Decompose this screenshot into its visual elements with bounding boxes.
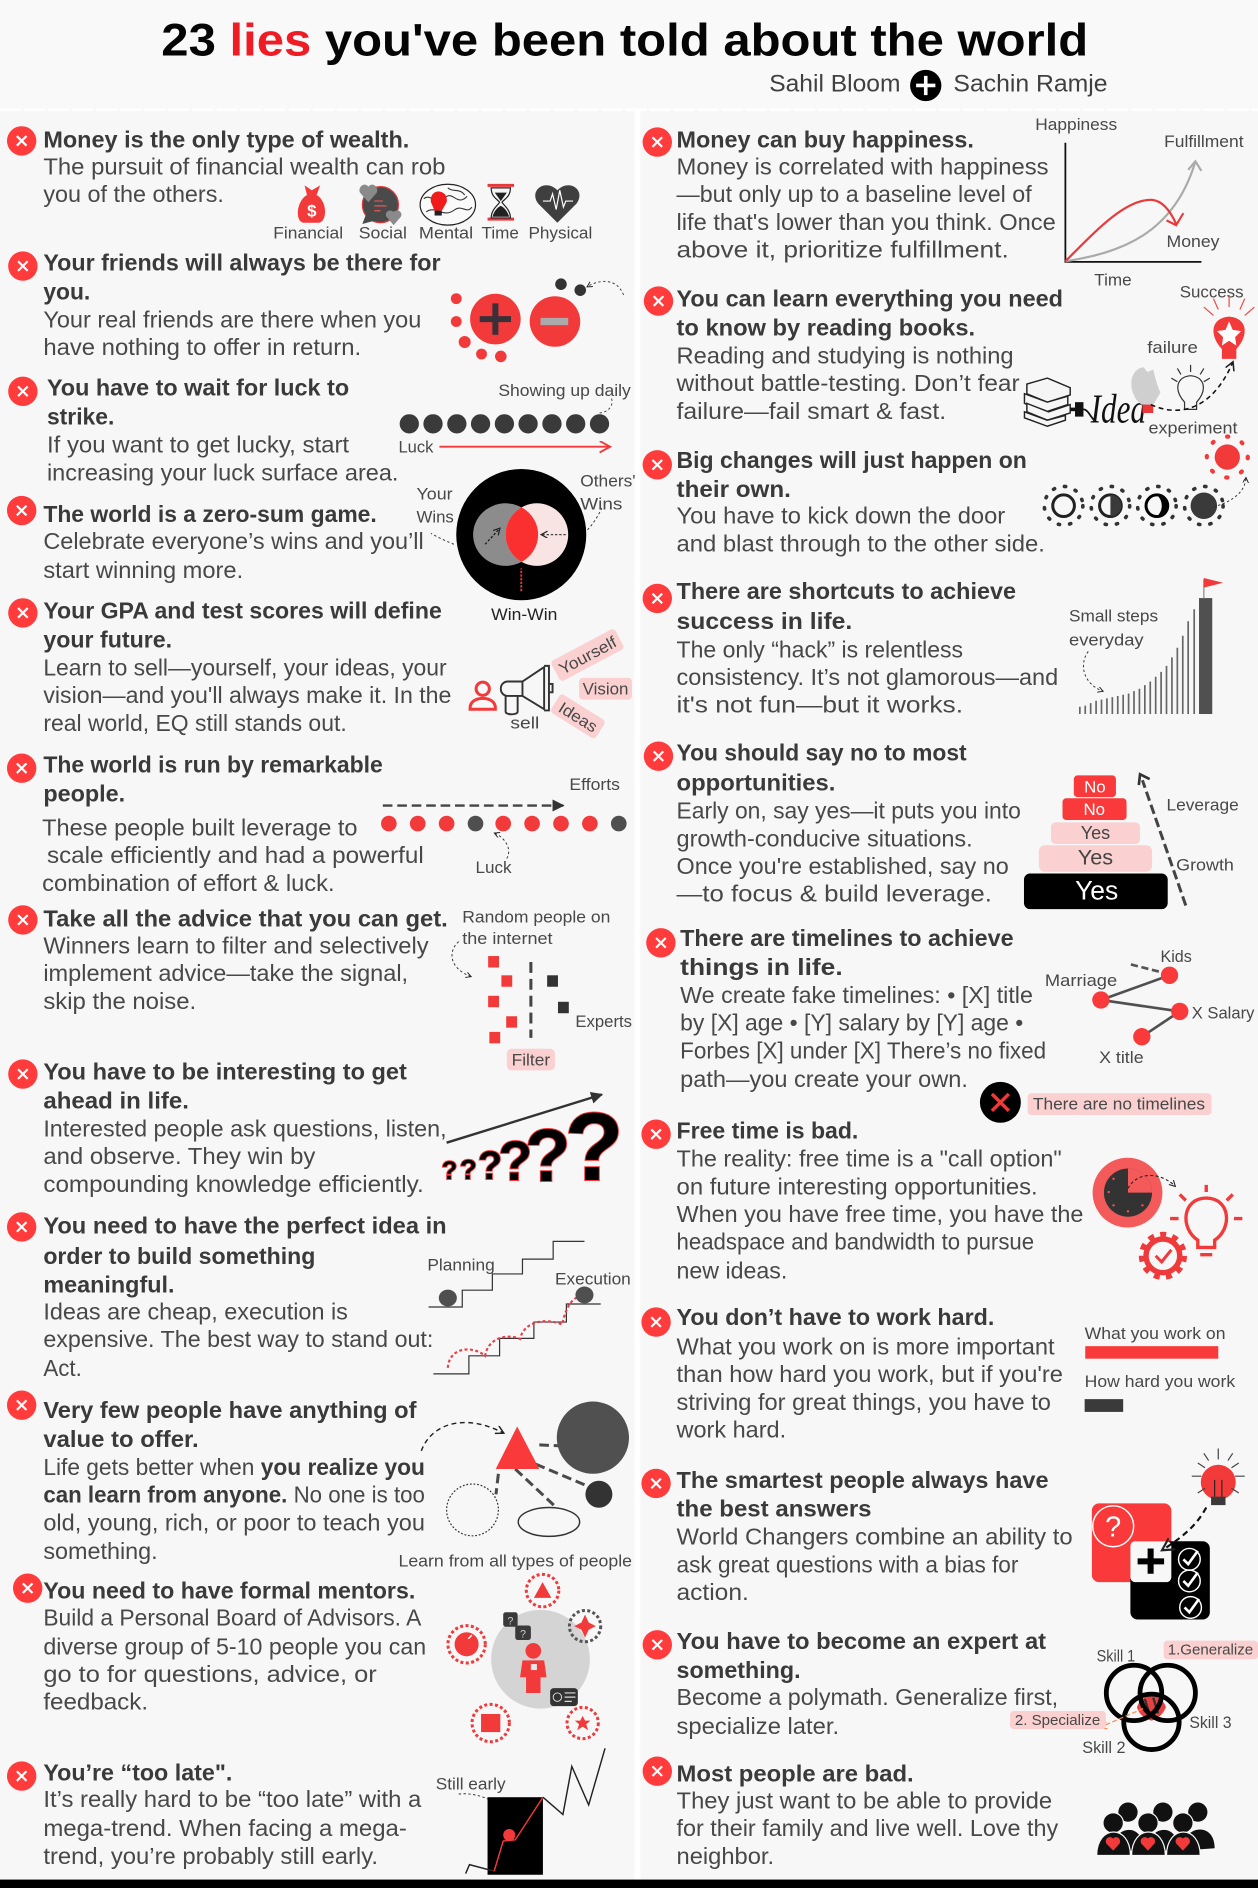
diagram: filter advice — [452, 908, 632, 1070]
lie: perfect idea: Act. — [43, 1355, 82, 1381]
lie: work hard: than how hard you work, but if you're — [677, 1361, 1063, 1387]
icon: broken bulb — [1131, 367, 1160, 413]
lie: most people bad: Most people are bad. — [677, 1761, 914, 1787]
diagram: win-win venn: Others' — [580, 472, 636, 490]
icon: black X badge — [980, 1082, 1021, 1123]
lie: timelines: by [X] age • [Y] salary by [Y] age • — [680, 1010, 1023, 1036]
lie: expert: specialize later. — [677, 1713, 839, 1739]
lie: books: Reading and studying is nothing — [677, 343, 1014, 369]
diagram: question marks and arrow: ? — [442, 1157, 457, 1185]
diagram: win-win venn: Wins — [580, 495, 622, 513]
lie: timelines: Forbes [X] under [X] There’s no fixed — [680, 1037, 1046, 1063]
chart: money vs fulfillment: Happiness — [1035, 116, 1117, 134]
lie: advice — [8, 905, 448, 1014]
diagram: skills venn: Skill 3 — [1189, 1714, 1232, 1732]
lie: mentors: You need to have formal mentors. — [43, 1578, 415, 1604]
icon: gear check — [1141, 1234, 1185, 1278]
lie: work hard: What you work on is more important — [677, 1333, 1055, 1359]
icons: five types of wealth: Time — [482, 224, 519, 242]
diagram: question marks and arrow — [442, 1094, 623, 1201]
lie: free time: When you have free time, you have the — [677, 1201, 1083, 1227]
chart: money vs fulfillment — [1035, 116, 1244, 289]
lie: most people bad: neighbor. — [677, 1843, 774, 1869]
diagram: filter advice: Random people on — [462, 908, 610, 926]
lie: smartest people: World Changers combine an ability to — [677, 1524, 1073, 1550]
lie: luck: You have to wait for luck to — [47, 375, 349, 401]
lie: friends: Your friends will always be there for — [43, 249, 441, 275]
lie: interesting: and observe. They win by — [43, 1143, 316, 1169]
lie: remarkable people: The world is run by remarkable — [43, 752, 383, 778]
lie: most people bad: for their family and live well. Love thy — [677, 1815, 1059, 1841]
lie: timelines: things in life. — [680, 954, 843, 980]
diagram: question marks and arrow: ? — [525, 1113, 570, 1197]
title: 23 lies you've been told about the world — [161, 14, 1088, 65]
lie: interesting: ahead in life. — [43, 1087, 189, 1113]
lie: money wealth: you of the others. — [43, 181, 224, 207]
lie: expert: something. — [677, 1657, 801, 1683]
diagram: yes no pyramid — [1024, 774, 1239, 909]
diagram: filter advice: the internet — [462, 930, 553, 948]
icon: heart pulse — [535, 185, 579, 223]
lie: smartest people: ask great questions with a bias for — [677, 1551, 1019, 1577]
diagram: showing up daily — [398, 382, 632, 457]
authors: Sahil Bloom — [769, 71, 900, 98]
lie: luck: increasing your luck surface area. — [47, 459, 398, 485]
authors: Sachin Ramje — [953, 71, 1108, 98]
lie: perfect idea: meaningful. — [43, 1272, 175, 1298]
lie: money wealth: Money is the only type of wealth. — [43, 127, 409, 153]
tag: Vision: Vision — [583, 681, 628, 699]
chart: money vs fulfillment: Time — [1094, 271, 1132, 289]
tag: Filter — [507, 1049, 555, 1070]
diagram: yes no pyramid: Leverage — [1167, 796, 1239, 814]
lie: GPA: real world, EQ still stands out. — [43, 710, 347, 736]
icon: people with hearts — [1097, 1803, 1215, 1855]
lie: GPA: vision—and you'll always make it. In the — [43, 682, 451, 708]
chart: money vs fulfillment: Money — [1167, 233, 1220, 251]
lie: free time: on future interesting opportunities. — [677, 1173, 1038, 1199]
diagram: all types of people: Learn from all types of people — [398, 1553, 632, 1571]
lie: shortcuts: success in life. — [677, 608, 852, 634]
lie: most people bad: They just want to be able to provide — [677, 1787, 1052, 1813]
lie: value to offer: Very few people have anything of — [43, 1397, 417, 1423]
lie: work hard — [641, 1304, 1063, 1443]
lie: smartest people: the best answers — [677, 1496, 872, 1522]
diagram: question marks and arrow: ? — [565, 1094, 623, 1201]
icon: social bubble — [359, 185, 401, 225]
lie: say no: opportunities. — [677, 770, 835, 796]
lie: expert: Become a polymath. Generalize first, — [677, 1684, 1058, 1710]
diagram: questions plus action — [1092, 1449, 1245, 1619]
lie: free time: new ideas. — [677, 1258, 787, 1284]
lie: big changes — [643, 447, 1045, 556]
diagram: skills venn: Skill 2 — [1082, 1739, 1126, 1757]
lie: remarkable people: combination of effort & luck. — [42, 870, 335, 896]
diagram: efforts and luck dots: Luck — [476, 859, 513, 877]
lie: luck: strike. — [47, 404, 114, 430]
diagram: skills venn — [1010, 1641, 1258, 1757]
lie: value to offer — [7, 1390, 425, 1564]
lie: big changes: Big changes will just happen on — [677, 447, 1027, 473]
lie: interesting: compounding knowledge efficiently. — [43, 1171, 424, 1197]
lie: luck: If you want to get lucky, start — [47, 432, 350, 458]
icon: books — [1024, 378, 1070, 426]
diagram: idea to success: Success — [1180, 283, 1244, 301]
lie: books: to know by reading books. — [677, 314, 975, 340]
lie: buy happiness: Money is correlated with happiness — [677, 153, 1049, 179]
lie: luck — [8, 375, 398, 485]
diagram: win-win venn: Win-Win — [491, 606, 557, 624]
icon: money bag: $ — [307, 202, 317, 221]
lie: mentors: Build a Personal Board of Advisors. A — [43, 1604, 422, 1630]
lie: free time: headspace and bandwidth to pursue — [677, 1229, 1034, 1255]
lie: GPA: your future. — [43, 626, 172, 652]
lie: say no: Once you're established, say no — [677, 853, 1009, 879]
icon: success bulb — [1204, 295, 1254, 359]
icon: person — [470, 682, 495, 709]
diagram: idea to success: failure — [1147, 339, 1198, 357]
lie: zero-sum: The world is a zero-sum game. — [43, 501, 377, 527]
diagram: yes no pyramid: Yes — [1075, 875, 1118, 905]
diagram: efforts and luck dots — [381, 776, 627, 877]
lie: mentors: diverse group of 5-10 people you can — [43, 1633, 426, 1659]
lie: remarkable people: These people built leverage to — [42, 815, 358, 841]
lie: value to offer: Life gets better when you realize you — [43, 1454, 425, 1480]
lie: too late: You’re “too late". — [43, 1759, 232, 1785]
authors — [769, 70, 1108, 101]
lie: buy happiness: above it, prioritize fulfillment. — [677, 237, 1009, 263]
diagram: idea to success: experiment — [1148, 419, 1238, 437]
icon: plus badge — [910, 70, 941, 101]
lie: friends: Your real friends are there when you — [43, 306, 421, 332]
lie: advice: Take all the advice that you can get. — [43, 906, 448, 932]
lie: expert — [643, 1628, 1058, 1739]
diagram: yes no pyramid: Growth — [1176, 857, 1234, 875]
diagram: efforts and luck dots: Efforts — [569, 776, 620, 794]
lie: perfect idea: order to build something — [43, 1243, 315, 1269]
diagram: board of advisors: ? — [520, 1629, 526, 1641]
lie: zero-sum: Celebrate everyone’s wins and you’ll — [43, 528, 424, 554]
diagram: idea to success — [1024, 283, 1254, 437]
icons: five types of wealth: Physical — [528, 224, 592, 242]
lie: mentors: feedback. — [43, 1689, 148, 1715]
icon: hourglass — [488, 185, 514, 219]
lie: money wealth — [7, 126, 445, 207]
tag: Vision — [579, 678, 632, 700]
diagram: megaphone sell: sell — [510, 714, 539, 732]
lie: advice: skip the noise. — [43, 988, 196, 1014]
lie: say no: growth-conducive situations. — [677, 825, 973, 851]
diagram: yes no pyramid: Yes — [1081, 823, 1110, 843]
diagram: questions plus action: ? — [1105, 1511, 1121, 1543]
lie: free time: Free time is bad. — [677, 1118, 858, 1144]
tag: generalize: 1.Generalize — [1168, 1642, 1253, 1658]
lie: friends: you. — [43, 278, 90, 304]
chart: what vs how hard: How hard you work — [1085, 1373, 1236, 1391]
diagram: timeline nodes: X Salary — [1192, 1005, 1255, 1023]
tag: Yourself — [550, 628, 625, 682]
lie: shortcuts: consistency. It’s not glamorous—and — [677, 664, 1058, 690]
lie: buy happiness: Money can buy happiness. — [677, 127, 974, 153]
lie: advice: implement advice—take the signal, — [43, 960, 408, 986]
icons: five types of wealth: Mental — [419, 224, 473, 242]
lie: smartest people: action. — [677, 1579, 749, 1605]
lie: shortcuts: The only “hack” is relentless — [677, 636, 963, 662]
lie: value to offer: something. — [43, 1538, 158, 1564]
lie: timelines: We create fake timelines: • [X] title — [680, 982, 1033, 1008]
lie: value to offer: value to offer. — [43, 1426, 199, 1452]
chart: small steps: Small steps — [1069, 607, 1158, 625]
chart: small steps — [1069, 578, 1223, 714]
icon: outline bulb — [1171, 365, 1210, 409]
icon: money bag — [298, 185, 325, 223]
lie: big changes: and blast through to the other side. — [677, 530, 1045, 556]
chart: what vs how hard: What you work on — [1085, 1325, 1225, 1343]
diagram: question marks and arrow: ? — [498, 1130, 532, 1192]
tag: Ideas — [550, 693, 606, 740]
lie: perfect idea: expensive. The best way to stand out: — [43, 1326, 433, 1352]
diagram: still early chart — [436, 1748, 605, 1875]
diagram: question marks and arrow: ? — [460, 1154, 477, 1185]
lie: buy happiness: —but only up to a baseline level of — [677, 181, 1032, 207]
lie: interesting — [8, 1059, 447, 1197]
lie: shortcuts: it's not fun—but it works. — [677, 692, 963, 718]
lie: value to offer: can learn from anyone. No one is too — [43, 1482, 425, 1508]
diagram: question marks and arrow: ? — [478, 1144, 502, 1188]
chart: what vs how hard — [1085, 1325, 1236, 1412]
lie: free time — [641, 1118, 1083, 1284]
lie: free time: The reality: free time is a "call option" — [677, 1146, 1062, 1172]
lie: expert: You have to become an expert at — [677, 1628, 1046, 1654]
lie: work hard: You don’t have to work hard. — [677, 1304, 994, 1330]
diagram: yes no pyramid: No — [1084, 800, 1105, 819]
lie: money wealth: The pursuit of financial wealth can rob — [43, 153, 445, 179]
lie: GPA: Your GPA and test scores will define — [43, 597, 442, 623]
lie: timelines: path—you create your own. — [680, 1066, 968, 1092]
icon: brain and bulb — [420, 184, 476, 225]
lie: say no: You should say no to most — [677, 739, 967, 765]
tag: Ideas: Ideas — [555, 699, 600, 736]
diagram: yes no pyramid: Yes — [1078, 845, 1113, 870]
lie: smartest people: The smartest people always have — [677, 1467, 1049, 1493]
lie: work hard: work hard. — [676, 1417, 786, 1443]
diagram: win-win venn: Wins — [417, 509, 454, 527]
icons: five types of wealth: Financial — [273, 224, 343, 242]
diagram: timeline nodes — [980, 948, 1255, 1123]
lie: big changes: their own. — [677, 476, 791, 502]
lie: friends: have nothing to offer in return. — [43, 334, 361, 360]
lie: mentors: go to for questions, advice, or — [43, 1661, 377, 1687]
lie: shortcuts: There are shortcuts to achieve — [677, 578, 1016, 604]
lie: interesting: Interested people ask questions, listen, — [43, 1116, 447, 1142]
icon: red bulb — [1192, 1449, 1245, 1505]
lie: advice: Winners learn to filter and selectively — [43, 933, 429, 959]
lie: too late — [7, 1759, 422, 1869]
diagram: yes no pyramid: No — [1084, 777, 1106, 796]
lie: smartest people — [641, 1467, 1073, 1605]
lie: books — [644, 286, 1063, 424]
diagram: sun phases — [1044, 437, 1248, 525]
lie: value to offer: old, young, rich, or poor to teach you — [43, 1509, 425, 1535]
lie: say no: —to focus & build leverage. — [677, 881, 992, 907]
diagram: win-win venn: Your — [417, 486, 453, 504]
tag: Yourself: Yourself — [556, 633, 620, 679]
lie: remarkable people: people. — [43, 780, 125, 806]
diagram: win-win venn — [417, 469, 636, 624]
lie: GPA — [8, 597, 451, 736]
lie: timelines: There are timelines to achieve — [680, 925, 1014, 951]
lie: zero-sum — [7, 496, 424, 583]
lie: books: without battle-testing. Don’t fear — [675, 370, 1020, 396]
lie: most people bad — [643, 1757, 1059, 1869]
lie: perfect idea — [7, 1212, 447, 1381]
tag: Filter: Filter — [512, 1052, 551, 1070]
diagram: planning vs execution stairs — [427, 1241, 631, 1374]
icons: five types of wealth — [273, 184, 592, 242]
lie: say no: Early on, say yes—it puts you into — [677, 798, 1021, 824]
diagram: megaphone sell — [470, 628, 632, 740]
diagram: board of advisors: ? — [507, 1615, 513, 1627]
lie: buy happiness: life that's lower than you think. Once — [677, 209, 1056, 235]
lie: remarkable people: scale efficiently and had a powerful — [47, 842, 424, 868]
lie: big changes: You have to kick down the door — [677, 503, 1006, 529]
lie: friends — [8, 249, 441, 360]
lie: too late: trend, you’re probably still early. — [43, 1843, 378, 1869]
tag: no timelines: There are no timelines — [1033, 1096, 1205, 1114]
diagram: planning vs execution stairs: Execution — [555, 1271, 631, 1289]
diagram: planning vs execution stairs: Planning — [427, 1256, 495, 1274]
diagram: showing up daily: Showing up daily — [498, 382, 632, 400]
lie: timelines — [646, 925, 1046, 1092]
diagram: skills venn: Skill 1 — [1097, 1648, 1135, 1666]
lie: too late: It’s really hard to be “too late” with a — [43, 1786, 422, 1812]
lie: mentors — [13, 1573, 426, 1715]
diagram: still early chart: Still early — [436, 1775, 507, 1793]
diagram: idea to success: Idea — [1090, 387, 1146, 432]
icons: five types of wealth: Social — [359, 224, 407, 242]
icon: bulb — [1170, 1185, 1242, 1255]
diagram: all types of people — [398, 1402, 632, 1571]
lie: work hard: striving for great things, you have to — [677, 1389, 1051, 1415]
lie: interesting: You have to be interesting to get — [43, 1059, 407, 1085]
tag: specialize: 2. Specialize — [1015, 1713, 1100, 1729]
diagram: timeline nodes: Marriage — [1045, 972, 1117, 990]
lie: zero-sum: start winning more. — [43, 557, 243, 583]
chart: money vs fulfillment: Fulfillment — [1164, 133, 1244, 151]
diagram: timeline nodes: Kids — [1160, 948, 1192, 966]
lie: shortcuts — [643, 578, 1058, 718]
diagram: filter advice: Experts — [575, 1013, 632, 1031]
diagram: plus and minus friends — [451, 278, 624, 362]
chart: small steps: everyday — [1069, 631, 1145, 649]
lie: books: You can learn everything you need — [677, 286, 1063, 312]
diagram: timeline nodes: X title — [1099, 1049, 1144, 1067]
lie: perfect idea: Ideas are cheap, execution is — [43, 1299, 348, 1325]
lie: buy happiness — [643, 127, 1056, 263]
lie: say no — [644, 739, 1021, 907]
lie: perfect idea: You need to have the perfect idea in — [43, 1213, 447, 1239]
lie: books: failure—fail smart & fast. — [677, 398, 946, 424]
diagram: board of advisors — [448, 1574, 601, 1742]
lie: remarkable people — [7, 752, 424, 896]
diagram: clock gear bulb — [1093, 1158, 1242, 1278]
lie: GPA: Learn to sell—yourself, your ideas, your — [43, 654, 447, 680]
diagram: showing up daily: Luck — [398, 439, 434, 457]
icon: megaphone — [501, 666, 553, 714]
lie: too late: mega-trend. When facing a mega- — [43, 1815, 407, 1841]
